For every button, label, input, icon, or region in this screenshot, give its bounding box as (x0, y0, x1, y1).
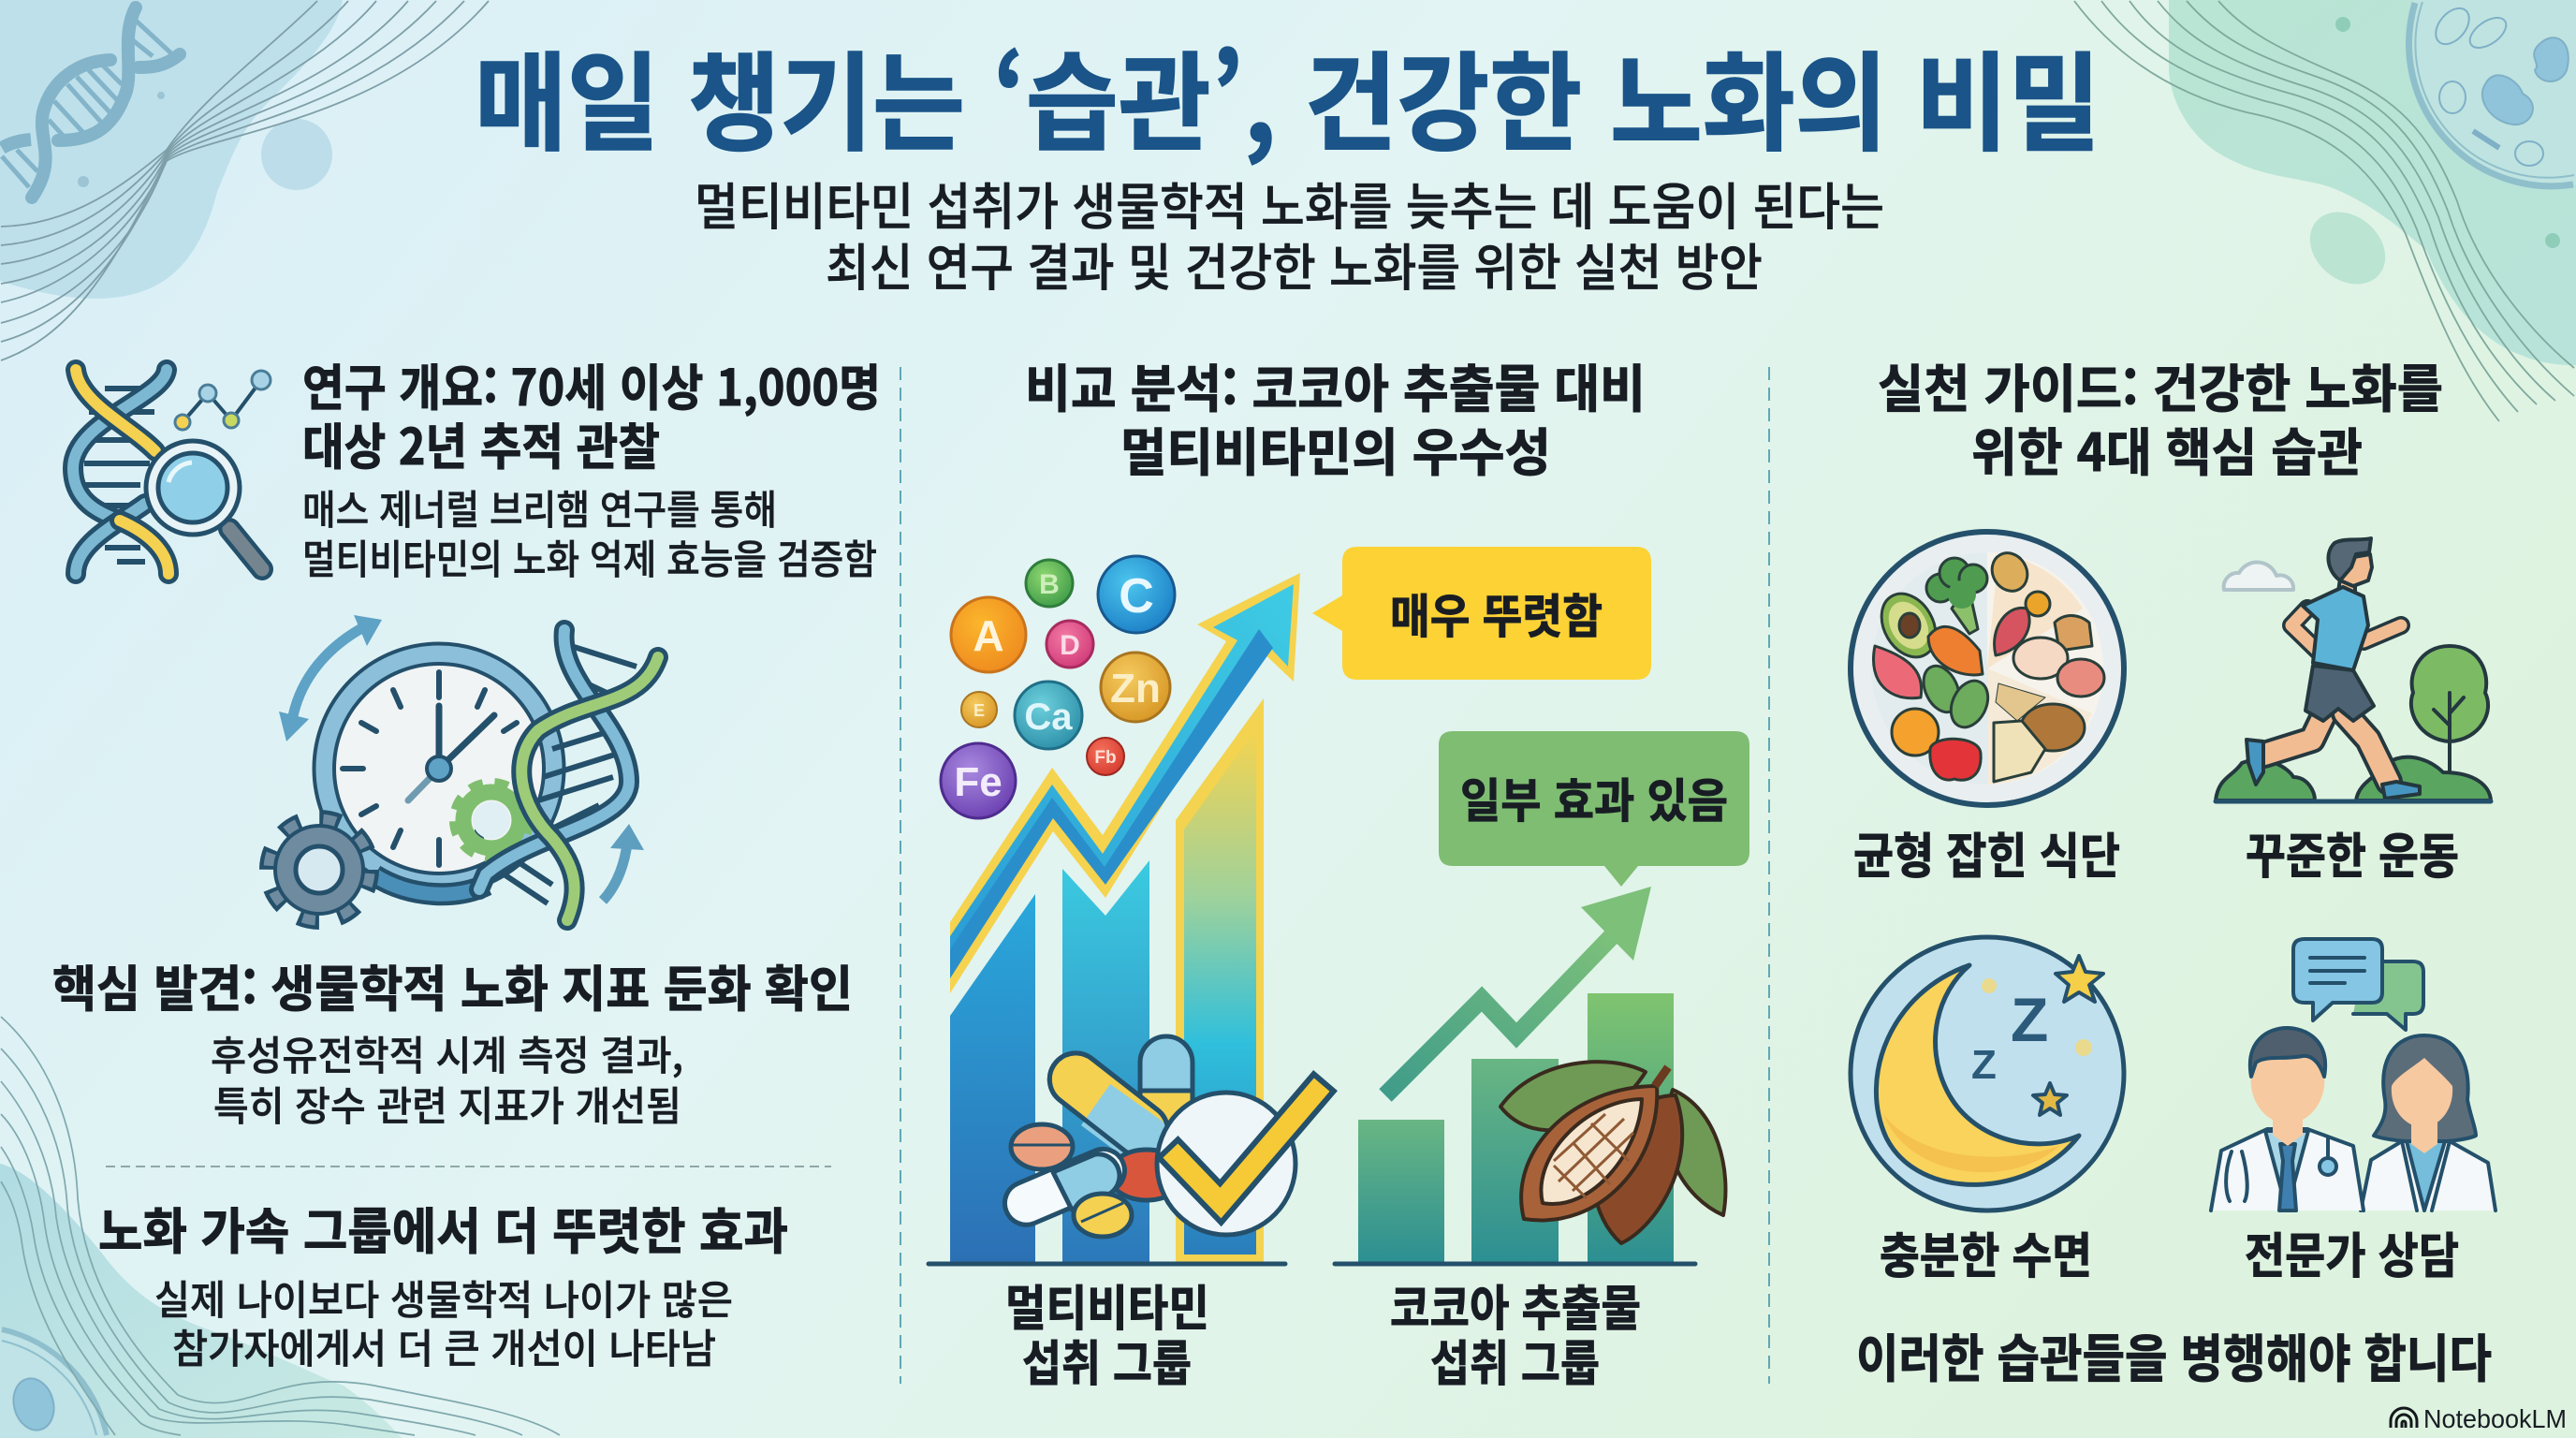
icon: vitamin bubbles (941, 556, 1175, 818)
label: cocoa group (1390, 1269, 1641, 1395)
icon: cocoa pod (1500, 1062, 1725, 1243)
text: key finding body (211, 1024, 683, 1133)
icon: doctors and speech bubbles (2211, 939, 2496, 1211)
text: accelerated aging body: 실제 나이보다 생물학적 나이가 많은 (154, 1269, 733, 1327)
bars: cocoa (1358, 993, 1674, 1262)
text: accelerated aging body (154, 1269, 733, 1375)
heading: accelerated aging group: 노화 가속 그룹에서 더 뚜렷한 효과 (98, 1193, 788, 1264)
icon: steel gear (271, 821, 368, 918)
decoration: top-right blob with cell (2169, 0, 2576, 365)
subtitle (695, 166, 1884, 301)
decoration: top-left flowing lines (1, 1, 489, 360)
title: 매일 챙기는 ‘습관’, 건강한 노화의 비밀 (475, 18, 2100, 172)
axis line (929, 1262, 1285, 1266)
panel: accelerated aging group (98, 1193, 788, 1375)
icon: vitamin bubbles: Ca (1024, 697, 1073, 738)
icon: vitamin bubbles: Zn (1110, 666, 1161, 712)
subtitle: 최신 연구 결과 및 건강한 노화를 위한 실천 방안 (826, 227, 1763, 301)
icon: DNA strand (479, 630, 658, 920)
arrow: small upward (603, 824, 644, 901)
callout: very clear (1312, 547, 1651, 680)
text: accelerated aging body: 참가자에게서 더 큰 개선이 나타남 (172, 1317, 716, 1375)
icon: moon and sleep: Z (1971, 1042, 1997, 1088)
icon: moon and sleep (1851, 937, 2124, 1211)
text: key finding body: 후성유전학적 시계 측정 결과, (211, 1024, 683, 1082)
heading: comparison: 멀티비타민의 우수성 (1120, 411, 1551, 486)
label: multivitamin group: 섭취 그룹 (1022, 1325, 1192, 1395)
arrow: rotating arrow left (279, 615, 382, 741)
icon: pills and check mark (998, 1036, 1315, 1237)
text: research overview body (302, 478, 877, 586)
callout: some effect: 일부 효과 있음 (1460, 764, 1728, 831)
icon: moon and sleep: Z (2011, 985, 2048, 1054)
axis line (1335, 1262, 1695, 1266)
arrow: strong rising trend (950, 573, 1300, 993)
icon: green gear (456, 785, 527, 856)
heading: practice guide: 위한 4대 핵심 습관 (1971, 411, 2363, 486)
heading: comparison: 비교 분석: 코코아 추출물 대비 (1025, 347, 1646, 422)
decoration: top-left blob with DNA (0, 0, 343, 299)
column dividers (900, 367, 1769, 1384)
panel: key finding (52, 950, 853, 1133)
label: sufficient sleep: 충분한 수면 (1880, 1217, 2092, 1287)
chart: cocoa extract group (1335, 887, 1725, 1264)
decoration: bottom-left blob with cell (0, 1164, 402, 1438)
text: research overview body: 매스 제너럴 브리햄 연구를 통해 (302, 478, 777, 536)
heading: comparison (1025, 347, 1646, 486)
icon: runner (2216, 538, 2491, 801)
label: multivitamin group (1005, 1269, 1209, 1395)
label: cocoa group: 섭취 그룹 (1430, 1325, 1600, 1395)
label: expert consultation: 전문가 상담 (2245, 1217, 2459, 1287)
label: balanced diet: 균형 잡힌 식단 (1853, 817, 2120, 888)
bars: multivitamin (950, 698, 1264, 1262)
icon: vitamin bubbles: E (973, 701, 985, 720)
heading: research overview (302, 349, 881, 479)
arrow: modest rising trend (1385, 887, 1651, 1095)
label: cocoa group: 코코아 추출물 (1390, 1269, 1641, 1340)
decoration: bottom-left flowing lines (1, 1017, 560, 1435)
label: regular exercise: 꾸준한 운동 (2246, 817, 2459, 888)
heading: research overview: 대상 2년 추적 관찰 (302, 408, 660, 479)
icon: DNA with magnifier (73, 370, 271, 574)
text: research overview body: 멀티비타민의 노화 억제 효능을 검증함 (302, 528, 877, 586)
icon: vitamin bubbles: B (1039, 569, 1060, 600)
decoration: top-right flowing lines (2074, 1, 2574, 421)
icon: vitamin bubbles: D (1060, 630, 1080, 661)
chart: multivitamin group (929, 556, 1315, 1264)
heading: key finding: 핵심 발견: 생물학적 노화 지표 둔화 확인 (52, 950, 853, 1021)
icon: balanced plate (1851, 532, 2124, 805)
label: multivitamin group: 멀티비타민 (1005, 1269, 1209, 1340)
logo: NotebookLM: NotebookLM (2423, 1404, 2567, 1433)
callout: very clear: 매우 뚜렷함 (1390, 580, 1603, 647)
heading: research overview: 연구 개요: 70세 이상 1,000명 (302, 349, 881, 420)
subtitle: 멀티비타민 섭취가 생물학적 노화를 늦추는 데 도움이 된다는 (695, 166, 1884, 240)
text: key finding body: 특히 장수 관련 지표가 개선됨 (213, 1075, 681, 1133)
icon: vitamin bubbles: A (973, 611, 1004, 660)
icon: clock with DNA and gears (271, 615, 658, 920)
icon: vitamin bubbles: C (1119, 569, 1154, 624)
text: closing statement: 이러한 습관들을 병행해야 합니다 (1856, 1317, 2492, 1392)
heading: practice guide (1878, 347, 2443, 486)
icon: vitamin bubbles: Fe (954, 759, 1003, 805)
heading: practice guide: 실천 가이드: 건강한 노화를 (1878, 347, 2443, 422)
callout: some effect (1439, 731, 1749, 887)
icon: vitamin bubbles: Fb (1094, 748, 1117, 768)
panel: research overview (73, 349, 881, 586)
